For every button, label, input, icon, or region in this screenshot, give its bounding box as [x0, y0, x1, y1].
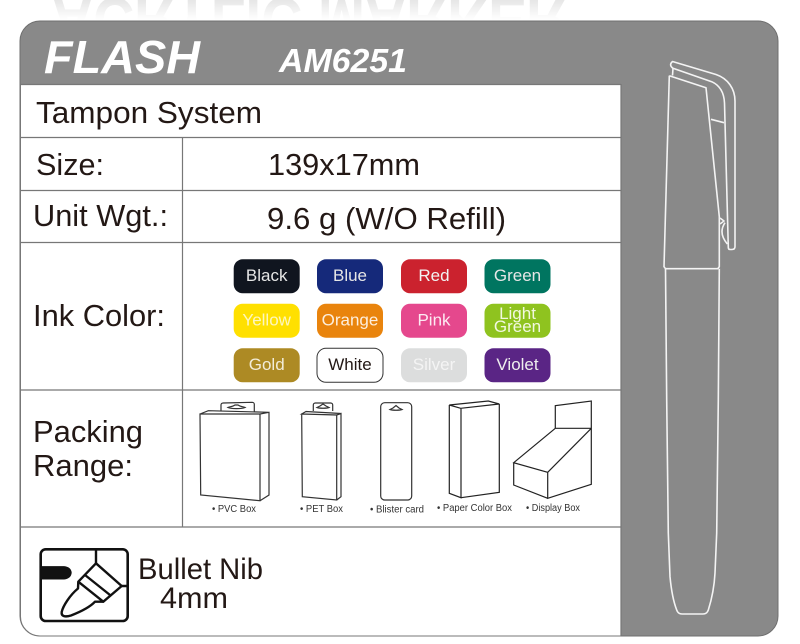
ink colour swatches [234, 259, 550, 382]
swatch: blue [317, 259, 383, 293]
nib text [138, 553, 263, 615]
packing range label [33, 415, 143, 483]
swatch: silver [401, 348, 467, 382]
packing range label: Range: [33, 449, 133, 483]
swatch: light green: Green [494, 317, 541, 336]
pen outline illustration [664, 62, 735, 614]
swatch: silver: Silver [413, 355, 456, 374]
title: FLASH: FLASH [44, 31, 201, 83]
swatch: light green [484, 304, 550, 338]
size value: 139x17mm [268, 148, 420, 182]
icon: bullet nib [41, 549, 128, 621]
pen clip [671, 62, 735, 250]
swatch: pink [401, 304, 467, 338]
icon: PVC box [200, 402, 269, 501]
swatch: violet [484, 348, 550, 382]
icon: blister card [381, 403, 412, 500]
swatch: black [234, 259, 300, 293]
system text: Tampon System [36, 96, 262, 130]
swatch: orange: Orange [322, 310, 378, 330]
label: blister card: • Blister card [370, 504, 424, 516]
swatch: violet: Violet [496, 355, 539, 374]
swatch: white: White [328, 355, 372, 374]
icon: display box [514, 401, 591, 498]
unit weight value: 9.6 g (W/O Refill) [267, 202, 506, 236]
swatch: red: Red [418, 266, 450, 285]
model number: AM6251 [278, 42, 407, 79]
ink colour label: Ink Color: [33, 299, 165, 333]
barrel [666, 269, 719, 614]
swatch: light green: Light [499, 304, 536, 323]
swatch: pink: Pink [417, 310, 451, 330]
label: PET box: • PET Box [300, 504, 343, 515]
label: PVC box: • PVC Box [212, 504, 256, 515]
label: display box: • Display Box [526, 503, 580, 514]
swatch: orange [317, 304, 383, 338]
icon: PET box [302, 403, 341, 500]
swatch: blue: Blue [333, 266, 367, 285]
swatch: white [317, 348, 383, 382]
unit weight label: Unit Wgt.: [33, 199, 168, 233]
icon: paper colour box [449, 401, 499, 498]
size label: Size: [36, 148, 104, 182]
swatch: green: Green [494, 266, 541, 285]
packing range label: Packing [33, 415, 143, 449]
swatch: yellow: Yellow [242, 310, 292, 330]
swatch: green [484, 259, 550, 293]
nib text: Bullet Nib [138, 553, 263, 586]
clip details [711, 119, 727, 244]
swatch: black: Black [246, 266, 288, 285]
swatch: gold [234, 348, 300, 382]
swatch: red [401, 259, 467, 293]
nib text: 4mm [160, 582, 228, 615]
swatch: yellow [234, 304, 300, 338]
swatch: gold: Gold [249, 355, 285, 374]
label: paper colour box: • Paper Color Box [437, 503, 512, 514]
cap body [664, 68, 719, 269]
